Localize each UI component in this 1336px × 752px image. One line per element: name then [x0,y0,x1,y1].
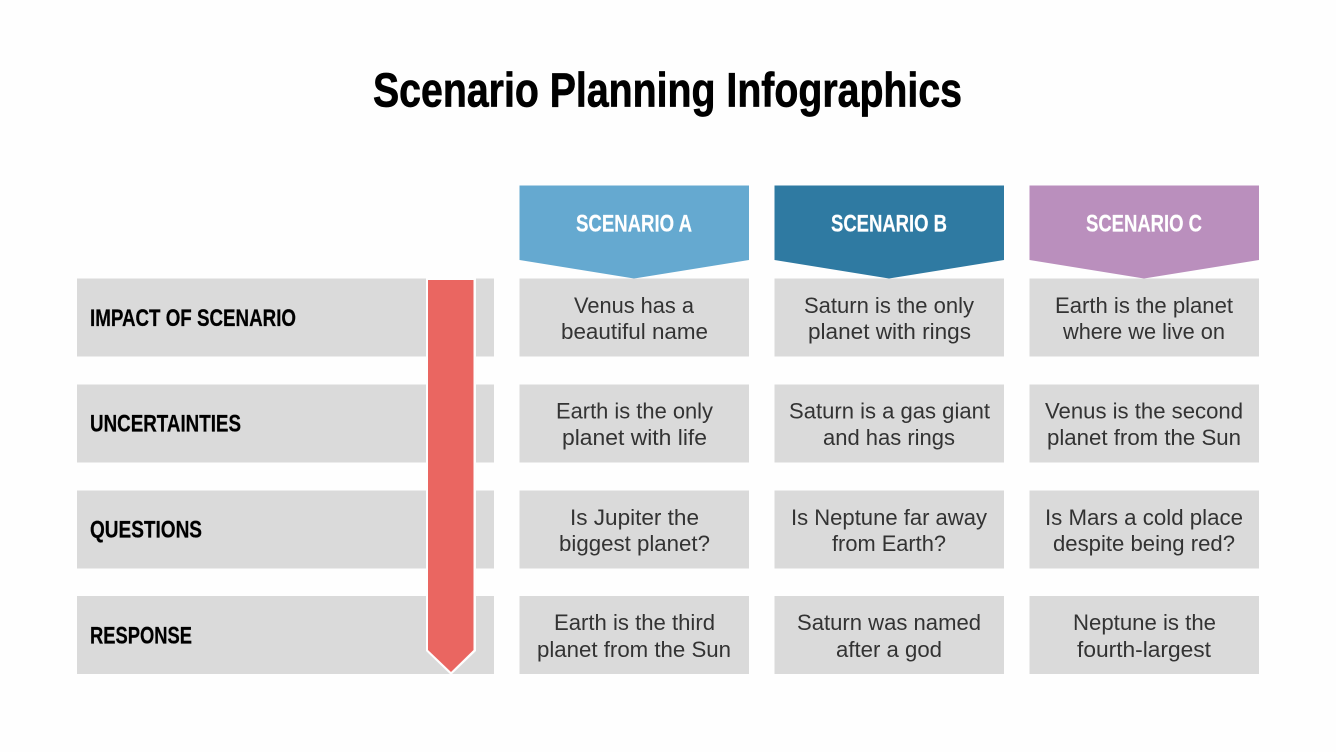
row label: response [77,596,494,674]
cell: C impact: Earth is the planet [1055,293,1233,318]
cell: C response: fourth-largest [1077,637,1211,662]
header: scenario a: SCENARIO A [576,210,692,238]
header: scenario a [520,186,749,278]
cell: B uncertainties: and has rings [823,425,955,450]
cell: B response: Saturn was named [797,610,981,635]
cell: C uncertainties: planet from the Sun [1047,425,1241,450]
row label: uncertainties [77,384,494,462]
cell: C uncertainties: Venus is the second [1045,398,1243,424]
cell: A impact [520,278,749,356]
title: Scenario Planning Infographics [373,64,962,118]
cell: B uncertainties: Saturn is a gas giant [789,398,990,424]
cell: B impact [774,278,1004,356]
cell: B impact: planet with rings [808,319,971,344]
cell: A questions: Is Jupiter the [570,505,699,530]
cell: A uncertainties [520,384,749,462]
cell: A impact: Venus has a [574,293,695,318]
row label: questions: QUESTIONS [90,516,202,544]
row label: uncertainties: UNCERTAINTIES [90,410,241,438]
cell: B uncertainties [774,384,1004,462]
cell: C questions [1030,490,1259,568]
cell: B questions [774,490,1004,568]
cell: C questions: Is Mars a cold place [1045,505,1243,530]
cell: B questions: from Earth? [832,531,946,556]
row label: impact of scenario: IMPACT OF SCENARIO [90,305,296,332]
cell: C impact [1030,278,1259,356]
cell: C response: Neptune is the [1073,610,1216,635]
row label: questions [77,490,494,568]
cell: C response [1030,596,1259,674]
header: scenario b: SCENARIO B [831,210,947,238]
cell: C impact: where we live on [1062,319,1225,344]
cell: A response [520,596,749,674]
cell: A response: Earth is the third [554,610,715,635]
cell: B impact: Saturn is the only [804,293,974,318]
header: scenario c [1030,186,1259,278]
header: scenario b [774,186,1004,278]
cell: C uncertainties [1030,384,1259,462]
row label: response: RESPONSE [90,622,192,650]
arrow: red downward [426,278,476,675]
cell: B questions: Is Neptune far away [791,505,987,530]
header: scenario c: SCENARIO C [1086,210,1202,238]
cell: A questions [520,490,749,568]
cell: A response: planet from the Sun [537,637,731,662]
cell: B response [774,596,1004,674]
row label: impact of scenario [77,278,494,356]
cell: C questions: despite being red? [1053,531,1235,556]
cell: A impact: beautiful name [561,319,708,344]
cell: A uncertainties: Earth is the only [556,398,713,424]
cell: A uncertainties: planet with life [562,425,707,450]
cell: A questions: biggest planet? [559,531,710,556]
cell: B response: after a god [836,637,942,662]
